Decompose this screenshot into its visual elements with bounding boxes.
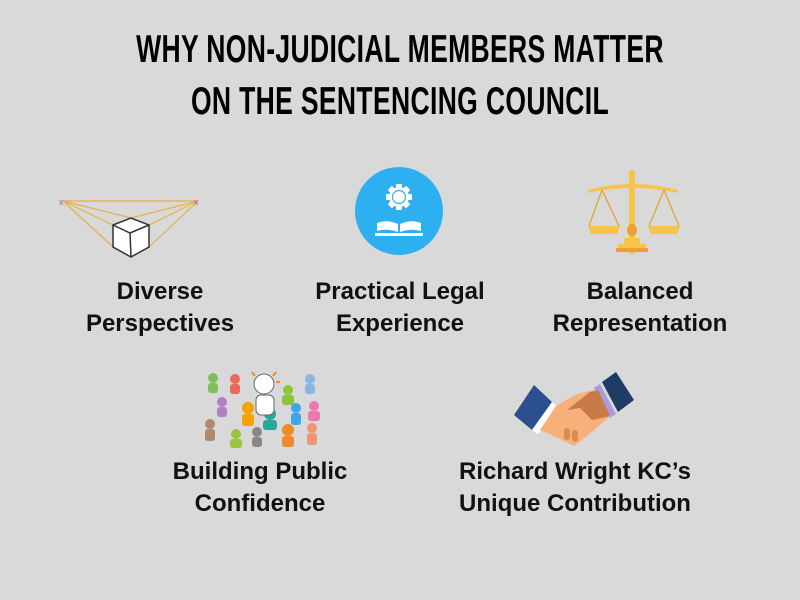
- icon: perspective cube: x: [59, 197, 64, 207]
- label: balanced representation: Representation: [553, 310, 727, 337]
- label: richard wright kc: Richard Wright KC’s: [459, 458, 691, 485]
- title: WHY NON-JUDICIAL MEMBERS MATTER: [136, 28, 664, 71]
- title: ON THE SENTENCING COUNCIL: [191, 80, 609, 123]
- label: practical legal experience: Practical Legal: [315, 278, 485, 305]
- label: diverse perspectives: [86, 278, 234, 337]
- title: [136, 28, 664, 123]
- label: richard wright kc: [459, 458, 691, 517]
- label: building public confidence: Building Public: [173, 458, 347, 485]
- label: practical legal experience: [315, 278, 485, 337]
- icon: scales: [588, 169, 680, 254]
- label: diverse perspectives: Diverse: [117, 278, 203, 305]
- label: building public confidence: Confidence: [195, 490, 325, 517]
- label: richard wright kc: Unique Contribution: [459, 490, 691, 517]
- label: balanced representation: Balanced: [587, 278, 693, 305]
- icon: crowd: [205, 371, 320, 448]
- icon: handshake: [514, 372, 634, 446]
- label: building public confidence: [173, 458, 347, 517]
- icon: perspective cube: x: [194, 197, 199, 207]
- label: balanced representation: [553, 278, 727, 337]
- label: diverse perspectives: Perspectives: [86, 310, 234, 337]
- label: practical legal experience: Experience: [336, 310, 464, 337]
- icon: gear and book: [355, 167, 443, 255]
- icon: perspective cube: [59, 197, 199, 258]
